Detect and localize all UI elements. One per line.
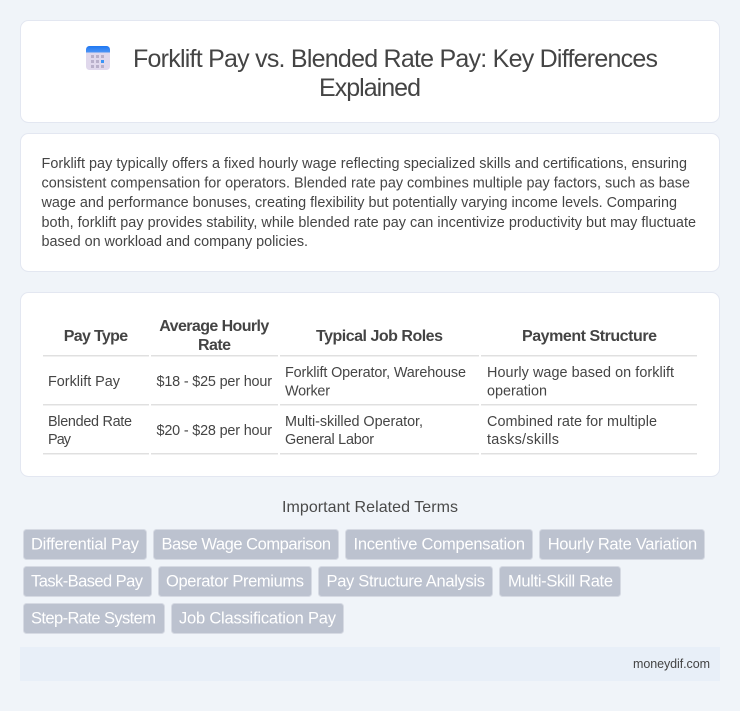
- table row: blended rate pay: tasks/skills: [487, 432, 559, 448]
- footer bar: [20, 647, 720, 681]
- intro paragraph: based on workload and company policies.: [42, 234, 308, 250]
- table row: blended rate pay: General Labor: [285, 432, 374, 448]
- tag: base wage comparison: [154, 530, 338, 560]
- table row: forklift pay: Forklift Pay: [48, 374, 121, 390]
- tag: differential pay: [24, 530, 146, 560]
- icon: calendar: [86, 46, 110, 70]
- tag: step-rate system: Step-Rate System: [31, 610, 156, 628]
- comparison table panel: [20, 292, 720, 476]
- intro paragraph: both, forklift pay provides stability, while blended rate pay can incentivize productivity but may fluctuate: [42, 215, 696, 231]
- title: Forklift Pay vs. Blended Rate Pay: Key Differences: [133, 45, 658, 73]
- tag: operator premiums: Operator Premiums: [166, 572, 304, 590]
- table row: blended rate pay: [48, 414, 657, 448]
- table row: forklift pay: $18 - $25 per hour: [156, 374, 272, 390]
- tag: differential pay: Differential Pay: [31, 536, 140, 554]
- table row: blended rate pay: $20 - $28 per hour: [156, 423, 272, 439]
- title: Explained: [319, 74, 421, 102]
- tag: incentive compensation: [346, 530, 532, 560]
- table header row: Average Hourly: [159, 318, 269, 335]
- tag: multi-skill rate: [500, 566, 620, 596]
- tag: multi-skill rate: Multi-Skill Rate: [508, 572, 613, 590]
- table row: blended rate pay: Pay: [48, 432, 72, 448]
- table row: blended rate pay: Combined rate for multiple: [487, 414, 657, 430]
- header panel: [20, 20, 720, 122]
- tag: hourly rate variation: Hourly Rate Variation: [548, 536, 697, 554]
- table header row: Rate: [198, 337, 231, 354]
- intro paragraph: consistent compensation for operators. Blended rate pay combines multiple pay factors, such as base: [42, 176, 690, 192]
- intro paragraph: Forklift pay typically offers a fixed hourly wage reflecting specialized skills and certifications, ensuring: [42, 156, 687, 172]
- table row: forklift pay: Worker: [285, 384, 330, 400]
- table row: blended rate pay: Blended Rate: [48, 414, 132, 430]
- tag: pay structure analysis: [318, 566, 492, 596]
- title: [133, 45, 658, 102]
- footer source text: moneydif.com: [633, 657, 710, 671]
- related term tags: [24, 530, 704, 634]
- tag: job classification pay: Job Classification Pay: [179, 610, 337, 628]
- tag: operator premiums: [158, 566, 312, 596]
- table header row: Pay Type: [64, 328, 128, 345]
- tag: task-based pay: Task-Based Pay: [31, 572, 144, 590]
- table header row: Typical Job Roles: [316, 328, 443, 345]
- tag: pay structure analysis: Pay Structure Analysis: [326, 572, 485, 590]
- table row: forklift pay: Hourly wage based on forklift: [487, 365, 674, 381]
- tag: task-based pay: [24, 566, 152, 596]
- tag: incentive compensation: Incentive Compensation: [354, 536, 525, 554]
- tag: hourly rate variation: [540, 530, 704, 560]
- intro paragraph: wage and performance bonuses, creating flexibility but potentially varying income levels. Comparing: [40, 195, 677, 211]
- table header row: [64, 318, 657, 354]
- tag: step-rate system: [24, 604, 164, 634]
- intro paragraph: [40, 156, 696, 250]
- tag: base wage comparison: Base Wage Comparison: [162, 536, 331, 554]
- tag: job classification pay: [172, 604, 344, 634]
- table row: forklift pay: operation: [487, 384, 547, 400]
- table row: blended rate pay: Multi-skilled Operator,: [285, 414, 423, 430]
- table row: forklift pay: Forklift Operator, Warehouse: [285, 365, 466, 381]
- table header row: Payment Structure: [522, 328, 657, 345]
- table row: forklift pay: [48, 365, 674, 400]
- related terms heading: Important Related Terms: [282, 499, 458, 516]
- intro text panel: [20, 134, 720, 272]
